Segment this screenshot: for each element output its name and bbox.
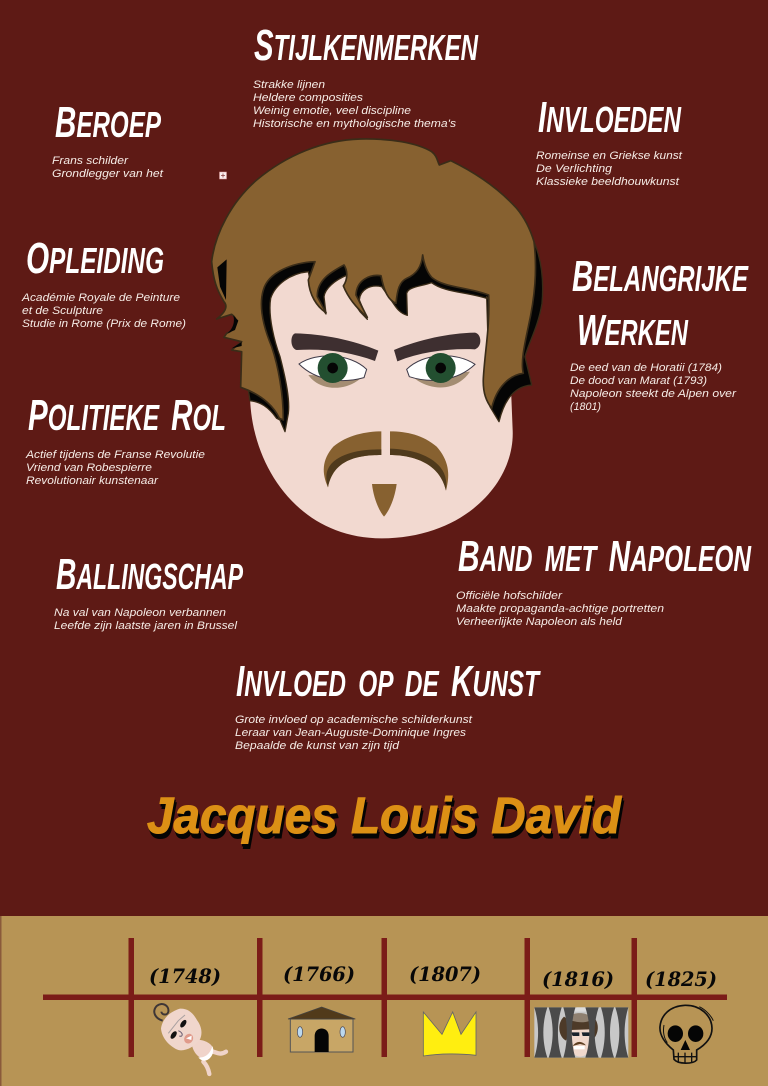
section: Belangrijke Werken (570, 252, 749, 413)
heading: INVLOED OP DE KUNST (236, 657, 541, 706)
right eyebrow (394, 333, 480, 361)
text block: Grondlegger van het (52, 168, 164, 180)
section: Opleiding (21, 234, 186, 330)
section: Invloed op de Kunst (235, 657, 541, 752)
text block: Vriend van Robespierre (26, 462, 152, 474)
left eyebrow (291, 333, 378, 361)
text block: De dood van Marat (1793) (570, 375, 707, 387)
text block: Académie Royale de Peinture (21, 292, 180, 304)
icon: overflow marker (220, 172, 226, 179)
heading line 2: WERKEN (577, 306, 689, 355)
heading: BALLINGSCHAP (56, 550, 244, 599)
panel: timeline (0, 916, 768, 1086)
year labels: (1825) (645, 967, 717, 991)
year labels: (1748) (149, 964, 221, 988)
text block: Studie in Rome (Prix de Rome) (22, 318, 186, 330)
icon: crown (423, 1012, 476, 1056)
text block: Grote invloed op academische schilderkunst (235, 714, 473, 726)
text block (570, 362, 737, 413)
icon: exile behind bars (534, 1007, 628, 1058)
text block: Maakte propaganda-achtige portretten (456, 603, 664, 615)
main title: Jacques Louis David (147, 787, 623, 844)
text block: Klassieke beeldhouwkunst (536, 176, 680, 188)
hair shadow (248, 197, 543, 432)
heading: POLITIEKE ROL (28, 391, 226, 440)
hair side slivers (217, 259, 242, 348)
moustache (324, 431, 448, 491)
heading: INVLOEDEN (538, 93, 682, 142)
text block (536, 150, 683, 188)
section: Beroep (52, 98, 164, 180)
portrait: David's face (212, 139, 543, 538)
main title: Jacques Louis David (149, 792, 625, 849)
text block (54, 607, 238, 632)
text block: Revolutionair kunstenaar (26, 475, 159, 487)
text block: et de Sculpture (22, 305, 103, 317)
text block: Leraar van Jean-Auguste-Dominique Ingres (235, 727, 467, 739)
text block: Frans schilder (52, 155, 129, 167)
text block: Bepaalde de kunst van zijn tijd (235, 740, 400, 752)
heading: BEROEP (55, 98, 162, 147)
text block (235, 714, 473, 752)
section: Stijlkenmerken (253, 21, 479, 130)
text block (21, 292, 186, 330)
text block: Actief tijdens de Franse Revolutie (25, 449, 205, 461)
face skin (250, 230, 513, 538)
text block: Napoleon steekt de Alpen over (570, 388, 737, 400)
heading: STIJLKENMERKEN (254, 21, 479, 70)
hair (212, 139, 536, 420)
section: Politieke Rol (25, 391, 226, 487)
text block: Verheerlijkte Napoleon als held (456, 616, 623, 628)
section: Ballingschap (54, 550, 244, 632)
text block: Romeinse en Griekse kunst (536, 150, 683, 162)
text block (52, 155, 164, 180)
goatee (372, 484, 397, 517)
icon: skull (660, 1005, 713, 1063)
timeline axis (43, 938, 727, 1057)
text block: Officiële hofschilder (456, 590, 563, 602)
text block: Strakke lijnen (253, 79, 325, 91)
text block (456, 590, 664, 628)
section: Invloeden (536, 93, 683, 188)
heading: OPLEIDING (26, 234, 164, 283)
year labels: (1816) (542, 967, 614, 991)
year labels (149, 962, 717, 991)
text block: (1801) (570, 401, 601, 413)
year labels: (1807) (409, 962, 481, 986)
section: Band met Napoleon (456, 532, 752, 628)
text block: Weinig emotie, veel discipline (253, 105, 411, 117)
year labels: (1766) (283, 962, 355, 986)
main title: Jacques Louis David (148, 790, 624, 846)
text block (253, 79, 457, 130)
text block: De Verlichting (536, 163, 613, 175)
text block: Na val van Napoleon verbannen (54, 607, 226, 619)
icon: baby (154, 1004, 226, 1074)
text block: De eed van de Horatii (1784) (570, 362, 722, 374)
icon: house (288, 1007, 355, 1052)
left eye (299, 353, 367, 388)
text block: Historische en mythologische thema's (253, 118, 457, 130)
right eye (407, 353, 475, 387)
text block: Heldere composities (253, 92, 364, 104)
text block (25, 449, 205, 487)
text block: Leefde zijn laatste jaren in Brussel (54, 620, 238, 632)
